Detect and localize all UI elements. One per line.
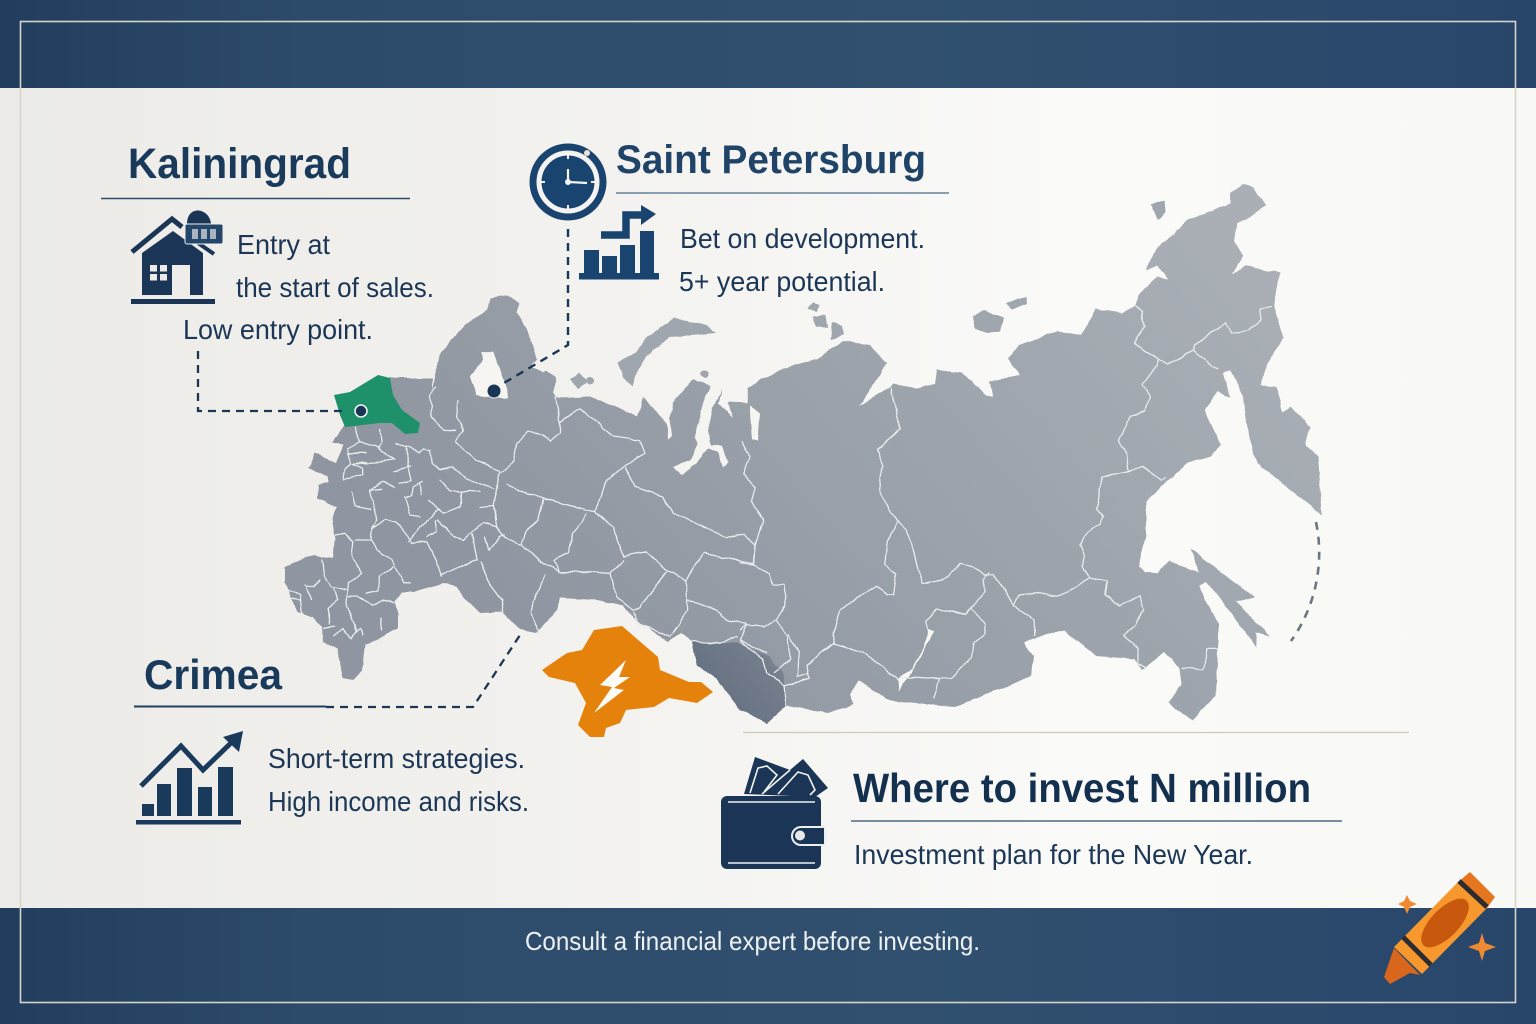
highlighted region: Crimea [542,626,713,737]
regional borders east [740,306,1272,706]
footer note: Consult a financial expert before investing. [525,926,980,956]
Lake Baikal [899,629,933,691]
southern dark region [692,642,787,723]
heading: Kaliningrad [128,140,351,188]
islands [570,200,1166,388]
icon: rising chart [136,731,243,824]
White Sea [470,352,509,398]
subheading: Investment plan for the New Year. [854,839,1253,870]
heading: Crimea [144,651,283,698]
connector: eastern dashed arc [1291,522,1319,641]
connector: Crimea [326,632,522,707]
text block [268,743,529,817]
panel: Kaliningrad [101,140,434,345]
sparkles [1398,895,1417,914]
regional borders west [287,427,505,638]
icon: house with sign [131,210,223,304]
regional borders central [430,387,767,653]
icon: lightning bolt [594,660,630,713]
text block [183,229,434,345]
text block: High income and risks. [268,786,529,817]
text block: the start of sales. [236,272,434,303]
top band [0,0,1536,88]
icon: bar chart with arrow [579,205,659,280]
text block: Bet on development. [680,223,925,254]
mainland silhouette [285,184,1322,723]
icon: clock [530,144,606,220]
highlighted region: Kaliningrad [334,375,420,434]
text block: 5+ year potential. [679,266,885,297]
text block: Low entry point. [183,314,373,345]
icon: wallet [721,757,828,869]
bottom band [0,908,1536,1024]
text block [679,223,925,297]
text block: Entry at [237,229,330,260]
heading: Saint Petersburg [616,138,926,182]
marker: Kaliningrad [355,405,367,417]
marker: Saint Petersburg [487,384,501,398]
panel: Saint Petersburg [530,138,949,297]
text block: Short-term strategies. [268,743,525,774]
panel: Crimea [134,651,529,824]
connector: Kaliningrad [198,351,345,411]
panel: where to invest [721,732,1409,870]
icon: crayon logo [1384,872,1496,984]
heading: Where to invest N million [853,765,1311,811]
connector: Saint Petersburg [504,229,568,383]
map of Russia [285,184,1322,723]
